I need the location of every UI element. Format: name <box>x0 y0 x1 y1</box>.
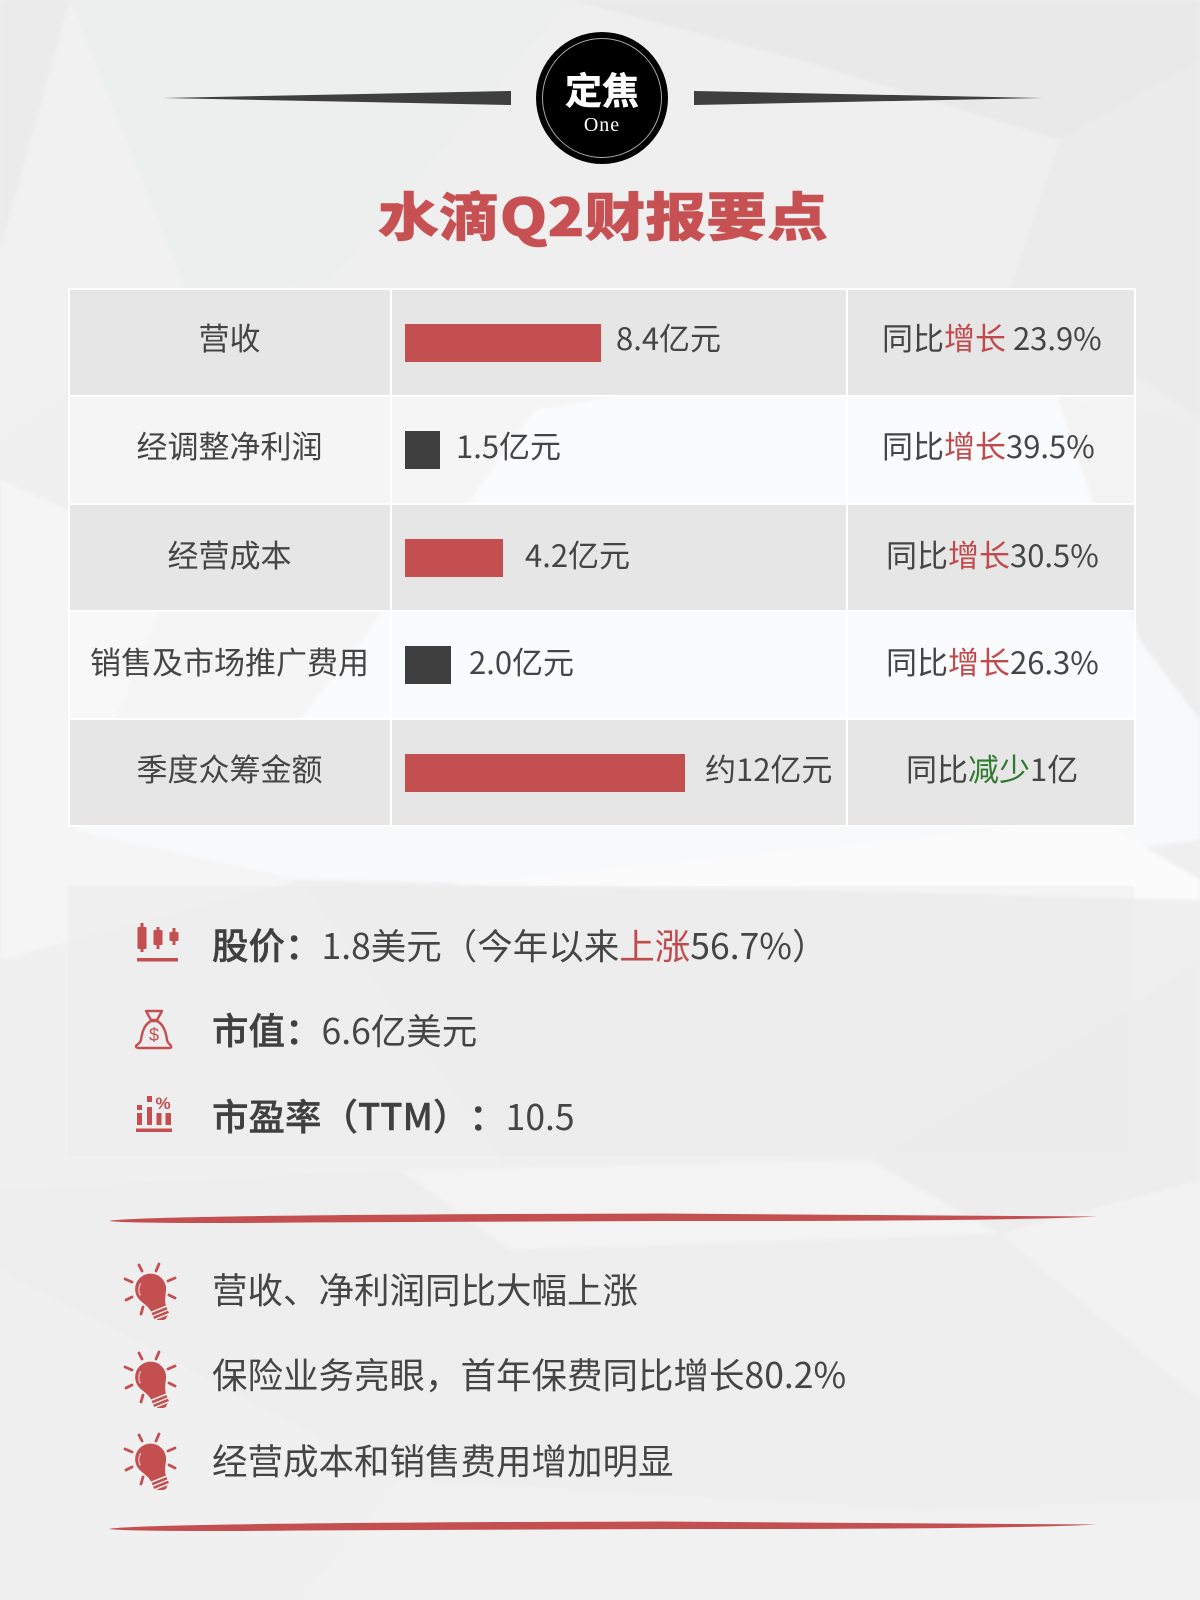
row: 营收: 营收 <box>198 314 260 359</box>
icon: candlestick <box>137 923 178 962</box>
icon: bulb <box>124 1350 176 1408</box>
row: 经调整净利润 <box>68 397 1136 503</box>
row: 销售及市场推广费用 <box>68 612 1136 718</box>
row: 季度众筹金额 <box>68 720 1134 827</box>
row: 经调整净利润: 1.5亿元 <box>456 422 561 467</box>
row: 销售及市场推广费用: 2.0亿元 <box>469 638 574 683</box>
icon: PE chart: % <box>155 1094 171 1113</box>
icon: bulb <box>124 1432 176 1490</box>
text: 市值: 市值：6.6亿美元 <box>212 1002 477 1055</box>
row: 销售及市场推广费用: 销售及市场推广费用 <box>90 638 369 683</box>
text: 市盈率: 市盈率（TTM） ：10.5 <box>212 1088 575 1141</box>
table: financial highlights <box>68 288 1136 827</box>
icon: money bag: $ <box>149 1025 159 1045</box>
divider: top brush line <box>109 1214 1096 1223</box>
row: 营收: 8.4亿元 <box>616 314 721 359</box>
bullet 1: 营收、净利润同比大幅上涨 <box>212 1263 638 1314</box>
row: 季度众筹金额: 季度众筹金额 <box>136 745 322 790</box>
text: 股价: 股价：1.8美元（今年以来上涨56.7%） <box>212 917 827 970</box>
title: 水滴Q2财报要点 <box>378 176 828 251</box>
badge: 定焦 One: 定焦 <box>565 61 639 115</box>
bullet 2: 保险业务亮眼，首年保费同比增长80.2% <box>212 1348 846 1399</box>
icon: bulb <box>124 1262 176 1320</box>
bullet 3: 经营成本和销售费用增加明显 <box>212 1434 674 1485</box>
badge: 定焦 One: One <box>584 114 620 136</box>
icon: PE chart <box>136 1094 172 1132</box>
left spindle divider <box>164 91 511 105</box>
row: 季度众筹金额: 同比减少1亿 <box>906 745 1078 790</box>
panel: market data <box>68 886 1134 1156</box>
badge: 定焦 One <box>536 32 668 164</box>
row: 经营成本: 经营成本 <box>168 531 292 576</box>
row: 经营成本: 同比增长30.5% <box>886 531 1099 576</box>
row: 销售及市场推广费用: 同比增长26.3% <box>886 638 1099 683</box>
right spindle divider <box>694 91 1040 105</box>
row: 营收 <box>68 288 1136 395</box>
row: 季度众筹金额: 约12亿元 <box>705 745 832 790</box>
icon: money bag <box>134 1010 172 1050</box>
row: 经调整净利润: 同比增长39.5% <box>882 422 1095 467</box>
row: 经调整净利润: 经调整净利润 <box>136 422 322 467</box>
list: takeaways <box>124 1262 846 1490</box>
row: 经营成本: 4.2亿元 <box>525 531 630 576</box>
row: 营收: 同比增长 23.9% <box>882 314 1102 359</box>
divider: bottom brush line <box>109 1522 1096 1531</box>
row: 经营成本 <box>68 505 1136 610</box>
